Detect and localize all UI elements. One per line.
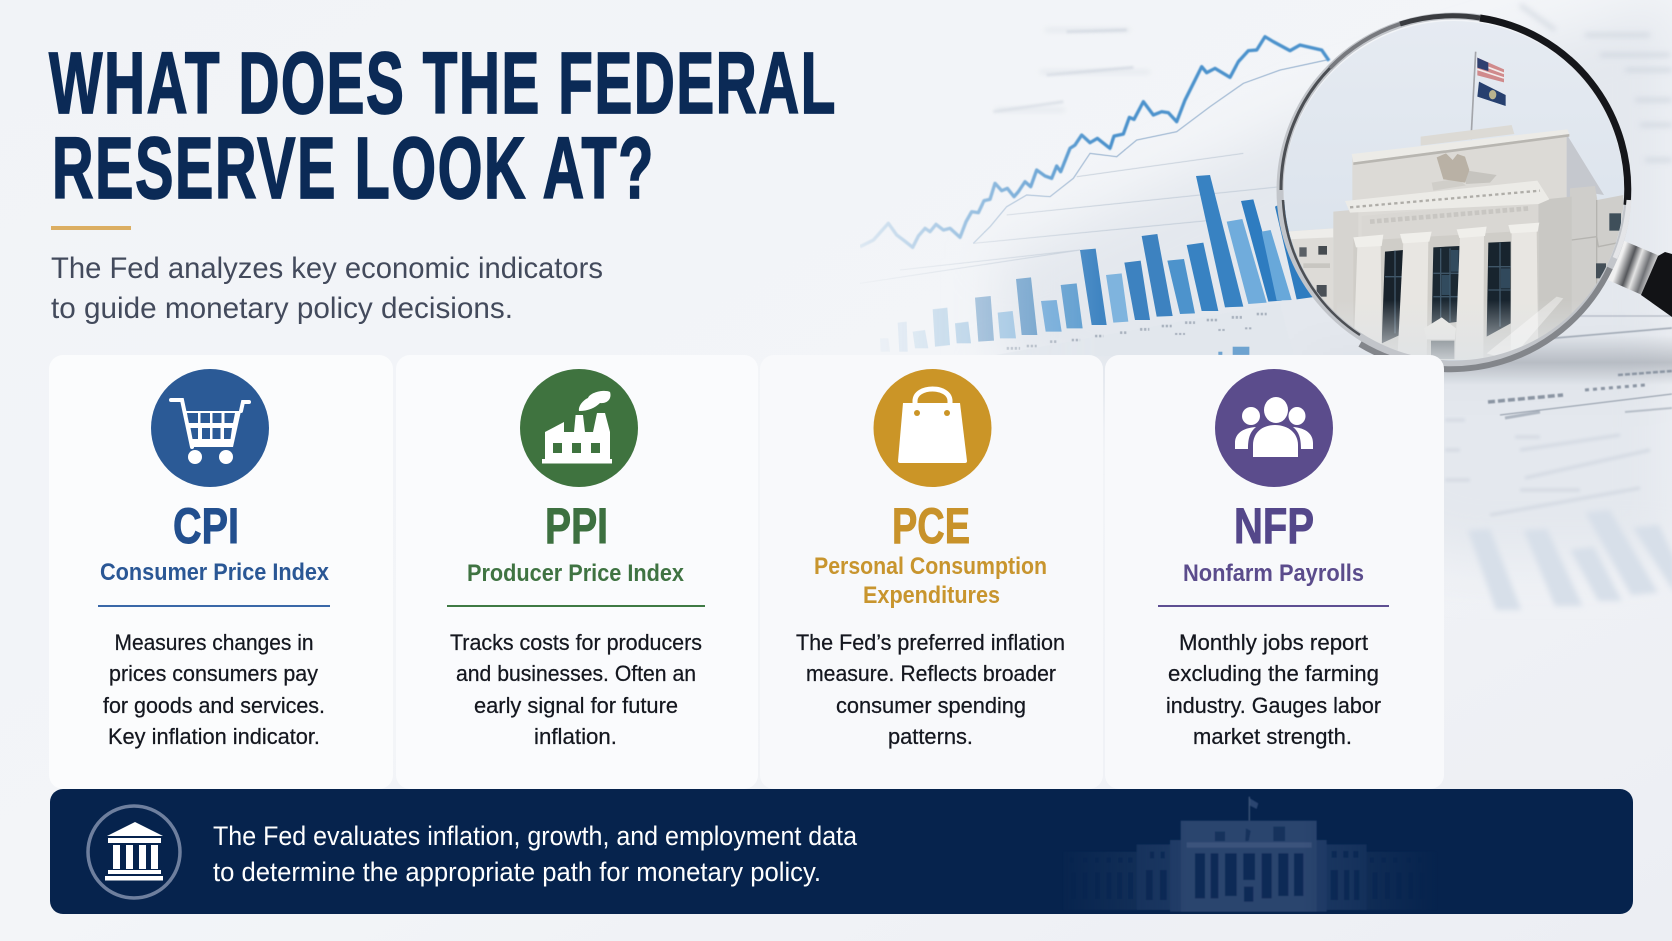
paper edge with tick labels: [1006, 312, 1267, 355]
description: measure. Reflects broader: [806, 661, 1056, 686]
description: for goods and services.: [103, 693, 325, 718]
chart: rising line and blue bars: [860, 30, 1329, 357]
description: excluding the farming: [1168, 661, 1379, 686]
lens rim: [1280, 16, 1629, 369]
description: [1166, 630, 1381, 749]
flags: [1471, 52, 1506, 139]
blurred heading text: [993, 30, 1133, 112]
icon: factory: [520, 369, 638, 487]
full name: Nonfarm Payrolls: [1183, 560, 1364, 587]
description: and businesses. Often an: [456, 661, 696, 686]
description: Key inflation indicator.: [108, 724, 320, 749]
background paper with faint data: [995, 5, 1672, 160]
card: PPI: [396, 355, 758, 789]
card: PCE: [760, 355, 1103, 789]
description: Monthly jobs report: [1179, 630, 1369, 655]
subtitle: to guide monetary policy decisions.: [51, 292, 513, 325]
grid lines: [860, 153, 1280, 283]
title: WHAT DOES THE FEDERAL: [49, 35, 837, 132]
main price line: [860, 37, 1329, 247]
attic: [1421, 125, 1514, 146]
lens glare and haze: [1352, 303, 1567, 360]
acronym: PPI: [545, 498, 608, 554]
door: [1424, 317, 1456, 339]
bar set: [880, 175, 1317, 352]
banner text: The Fed evaluates inflation, growth, and employment data: [213, 821, 857, 851]
background paper tint behind charts: [1000, 0, 1672, 560]
lower right paper with blurred table and bars: [1440, 316, 1672, 607]
subtitle: The Fed analyzes key economic indicators: [51, 252, 603, 285]
acronym: CPI: [173, 498, 239, 554]
cornice with dentils: [1345, 181, 1549, 213]
left wing: [1289, 232, 1334, 310]
sharp table text: [1488, 316, 1672, 418]
columns: [1354, 232, 1538, 349]
lens scene: federal reserve building: [1280, 15, 1630, 365]
title: RESERVE LOOK AT?: [52, 120, 655, 217]
magnifying glass: [1280, 15, 1672, 369]
right side wall: [1566, 136, 1604, 197]
main upper block: [1352, 137, 1566, 237]
banner text: [213, 821, 857, 887]
description: [796, 630, 1065, 749]
subtitle: [51, 252, 603, 325]
icon: shopping bag: [874, 369, 992, 487]
description: market strength.: [1193, 724, 1352, 749]
title: [49, 35, 837, 217]
frieze: [1383, 228, 1510, 239]
paper shadow below lens: [1440, 335, 1672, 385]
column capitals: [1353, 223, 1539, 247]
description: prices consumers pay: [109, 661, 319, 686]
gold accent bar: [51, 226, 131, 230]
description: [103, 630, 325, 749]
portico back wall: [1380, 232, 1538, 353]
rule: [1158, 605, 1389, 607]
portico shadow side: [1538, 197, 1572, 338]
rule: [447, 605, 705, 607]
description: Tracks costs for producers: [450, 630, 702, 655]
blurred table text: [1445, 420, 1650, 515]
full name: [814, 553, 1047, 609]
right wings: [1570, 186, 1624, 314]
banner text: to determine the appropriate path for monetary policy.: [213, 857, 821, 887]
full name: Producer Price Index: [467, 560, 685, 587]
acronym: NFP: [1234, 498, 1314, 554]
full name: Expenditures: [863, 582, 1000, 609]
description: [450, 630, 702, 749]
description: early signal for future: [474, 693, 678, 718]
handle: [1608, 240, 1672, 317]
description: patterns.: [888, 724, 973, 749]
rule: [98, 605, 330, 607]
description: The Fed’s preferred inflation: [796, 630, 1065, 655]
card: CPI: [49, 355, 393, 789]
description: inflation.: [534, 724, 617, 749]
description: consumer spending: [836, 693, 1026, 718]
icon: institution in a ring: [88, 806, 180, 898]
summary banner: [50, 789, 1633, 914]
full name: Personal Consumption: [814, 553, 1047, 580]
icon: shopping cart: [151, 369, 269, 487]
description: Measures changes in: [114, 630, 314, 655]
windows: [1382, 242, 1511, 343]
faint secondary line: [973, 60, 1327, 243]
eagle statue: [1432, 153, 1497, 191]
description: industry. Gauges labor: [1166, 693, 1381, 718]
watermark building: [1112, 796, 1375, 912]
full name: Consumer Price Index: [100, 559, 330, 586]
icon: people: [1215, 369, 1333, 487]
card: NFP: [1105, 355, 1444, 789]
blurred bars: [1472, 513, 1672, 607]
acronym: PCE: [892, 498, 970, 554]
